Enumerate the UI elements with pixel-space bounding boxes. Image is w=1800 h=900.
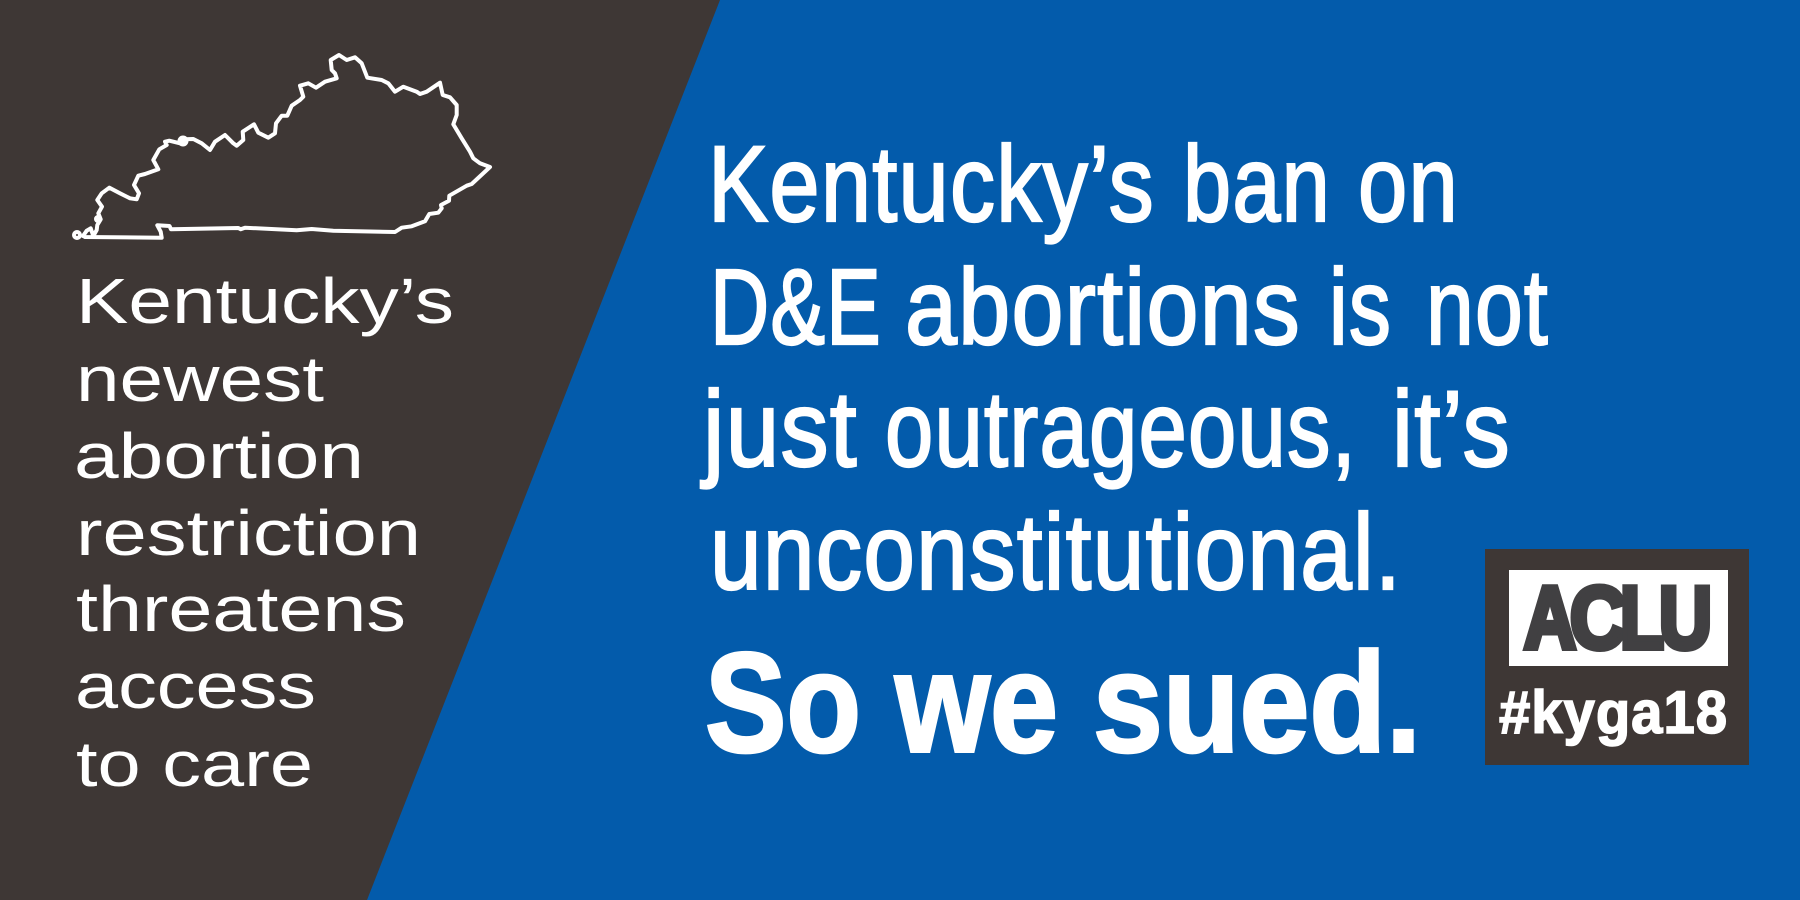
panel: dark diagonal bbox=[0, 0, 720, 900]
text block: left panel statement: access bbox=[75, 650, 316, 722]
logo wordmark: A bbox=[1524, 568, 1576, 667]
text block: left panel statement bbox=[74, 265, 454, 800]
heading: main statement: ban bbox=[1183, 123, 1331, 244]
text block: left panel statement: threatens bbox=[76, 573, 406, 645]
heading: main statement bbox=[700, 123, 1549, 612]
callout: So we sued: So bbox=[705, 624, 861, 782]
heading: main statement: abortions bbox=[905, 246, 1301, 367]
text block: left panel statement: abortion bbox=[74, 420, 364, 492]
heading: main statement: just bbox=[700, 368, 858, 489]
callout: So we sued bbox=[705, 624, 1421, 782]
icon: Kentucky state outline bbox=[74, 55, 490, 238]
heading: main statement: D&E bbox=[710, 246, 882, 367]
heading: main statement: unconstitutional. bbox=[710, 491, 1402, 612]
text block: left panel statement: to care bbox=[76, 728, 313, 800]
text block: left panel statement: newest bbox=[76, 343, 324, 415]
logo block: ACLU and hashtag bbox=[1485, 549, 1749, 765]
callout: So we sued: we bbox=[894, 624, 1058, 782]
logo wordmark: L bbox=[1620, 568, 1664, 667]
heading: main statement: outrageous, bbox=[885, 368, 1357, 489]
heading: main statement: Kentucky’s bbox=[708, 123, 1155, 244]
callout: So we sued: sued. bbox=[1093, 624, 1421, 782]
heading: main statement: not bbox=[1426, 246, 1549, 367]
heading: main statement: on bbox=[1358, 123, 1459, 244]
hashtag: #kyga18 bbox=[1499, 679, 1728, 746]
logo wordmark bbox=[1524, 568, 1712, 667]
logo wordmark: U bbox=[1659, 568, 1712, 667]
heading: main statement: it’s bbox=[1392, 368, 1511, 489]
text block: left panel statement: Kentucky’s bbox=[76, 265, 454, 337]
text block: left panel statement: restriction bbox=[76, 497, 421, 569]
heading: main statement: is bbox=[1329, 246, 1392, 367]
logo wordmark: C bbox=[1570, 568, 1626, 667]
